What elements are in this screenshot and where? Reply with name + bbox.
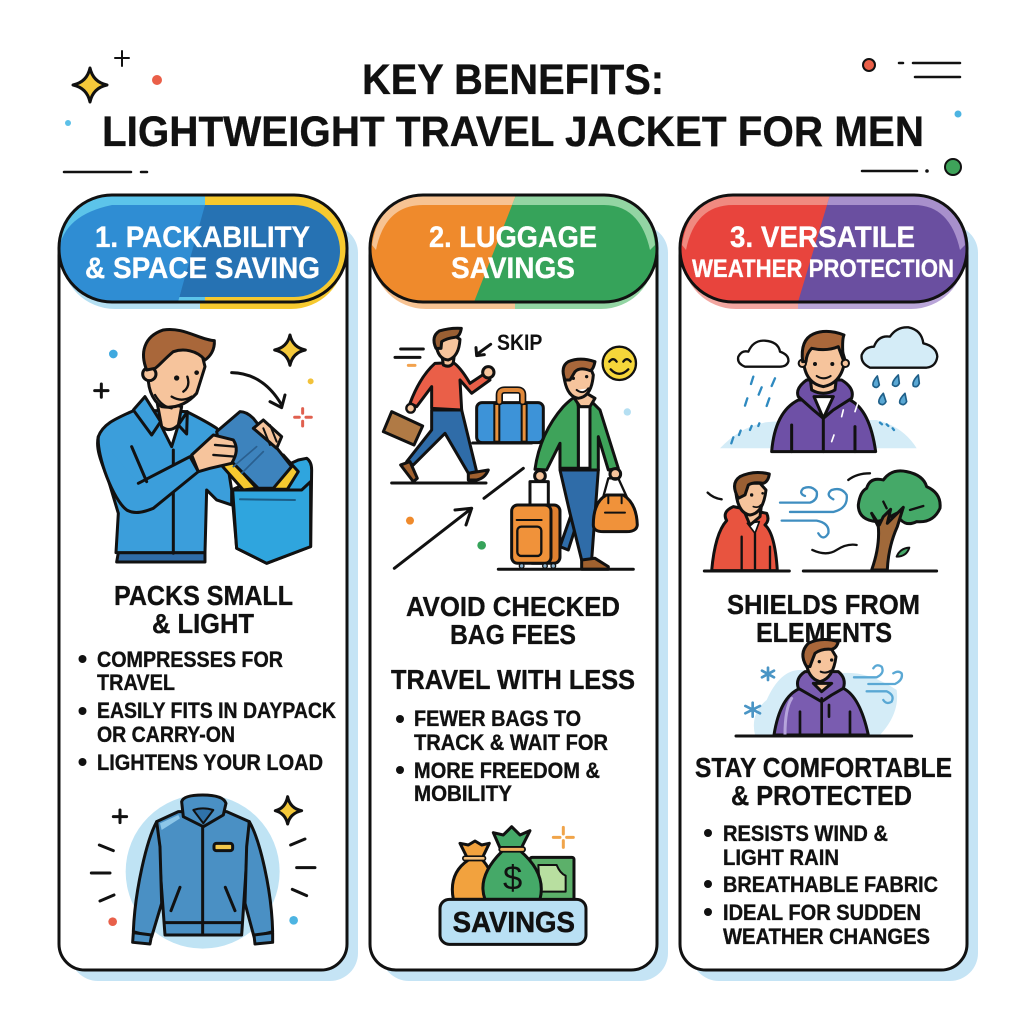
illustration: man packing jacket into pocket (95, 329, 314, 563)
panel: luggage savings (370, 195, 668, 981)
panel 3 bullet list: IDEAL FOR SUDDEN (723, 900, 921, 925)
title (102, 56, 924, 156)
panel 1 heading: & LIGHT (152, 608, 254, 639)
panel 3 first heading (727, 589, 920, 648)
panel 1 header: 1. PACKABILITY (95, 221, 310, 254)
panel 1 bullet list: COMPRESSES FOR (97, 647, 283, 672)
panel 2 headings (391, 591, 635, 695)
panel 3 header (680, 195, 967, 309)
title: KEY BENEFITS: (362, 56, 664, 104)
illustration: jacket (91, 795, 315, 949)
panel 2 headings: AVOID CHECKED (406, 591, 620, 622)
illustration: skipping bag check: SKIP (497, 330, 542, 355)
panel 2 body (370, 225, 668, 981)
illustration: savings money bags: $ (503, 859, 522, 897)
panel 3 bullet list: BREATHABLE FABRIC (723, 872, 938, 897)
panel 1 bullet list: TRAVEL (97, 670, 175, 695)
panel: packability (59, 195, 358, 981)
decorative sparkles left (64, 51, 162, 172)
panel 3 bullet list (704, 821, 938, 949)
panel 3 bullet list: LIGHT RAIN (723, 845, 839, 870)
panel 2 bullet list: FEWER BAGS TO (414, 706, 581, 731)
panel 2 bullet list (396, 706, 608, 806)
panel 3 second heading (695, 752, 952, 811)
panel 3 body (680, 225, 978, 981)
panel 2 headings: BAG FEES (450, 619, 576, 650)
panel 3 first heading: SHIELDS FROM (727, 589, 920, 620)
panel 2 header (370, 195, 657, 309)
panel 2 headings: TRAVEL WITH LESS (391, 664, 635, 695)
panel 1 header: & SPACE SAVING (85, 252, 320, 285)
illustration: savings money bags: SAVINGS (453, 907, 575, 939)
panel 1 body (59, 225, 358, 981)
illustration: man in rain (720, 327, 937, 452)
illustration: savings money bags (440, 827, 586, 944)
panel 3 first heading: ELEMENTS (756, 617, 892, 648)
panel 1 heading: PACKS SMALL (114, 580, 293, 611)
panel 2 bullet list: MORE FREEDOM & (414, 758, 600, 783)
panel 2 header: SAVINGS (451, 252, 575, 285)
panel 1 bullet list (78, 647, 336, 775)
panel 1 heading (114, 580, 293, 639)
title: LIGHTWEIGHT TRAVEL JACKET FOR MEN (102, 108, 924, 156)
panel 3 second heading: STAY COMFORTABLE (695, 752, 952, 783)
panel: weather protection (680, 195, 978, 981)
panel 3 header: WEATHER PROTECTION (692, 255, 954, 283)
illustration: skipping bag check (383, 328, 637, 569)
panel 2 header: 2. LUGGAGE (429, 221, 597, 254)
panel 3 second heading: & PROTECTED (731, 780, 912, 811)
panel 2 bullet list: MOBILITY (414, 781, 512, 806)
panel 1 header (59, 195, 347, 309)
panel 2 bullet list: TRACK & WAIT FOR (414, 730, 608, 755)
illustration: man in wind with tree (704, 471, 940, 571)
panel 3 bullet list: RESISTS WIND & (723, 821, 888, 846)
panel 3 header: 3. VERSATILE (730, 221, 915, 254)
decorative sparkles right (862, 59, 962, 175)
panel 1 bullet list: LIGHTENS YOUR LOAD (97, 750, 323, 775)
panel 3 bullet list: WEATHER CHANGES (723, 924, 930, 949)
illustration: man in snow and wind (736, 640, 912, 736)
panel 1 bullet list: OR CARRY-ON (97, 722, 235, 747)
panel 1 bullet list: EASILY FITS IN DAYPACK (97, 698, 336, 723)
